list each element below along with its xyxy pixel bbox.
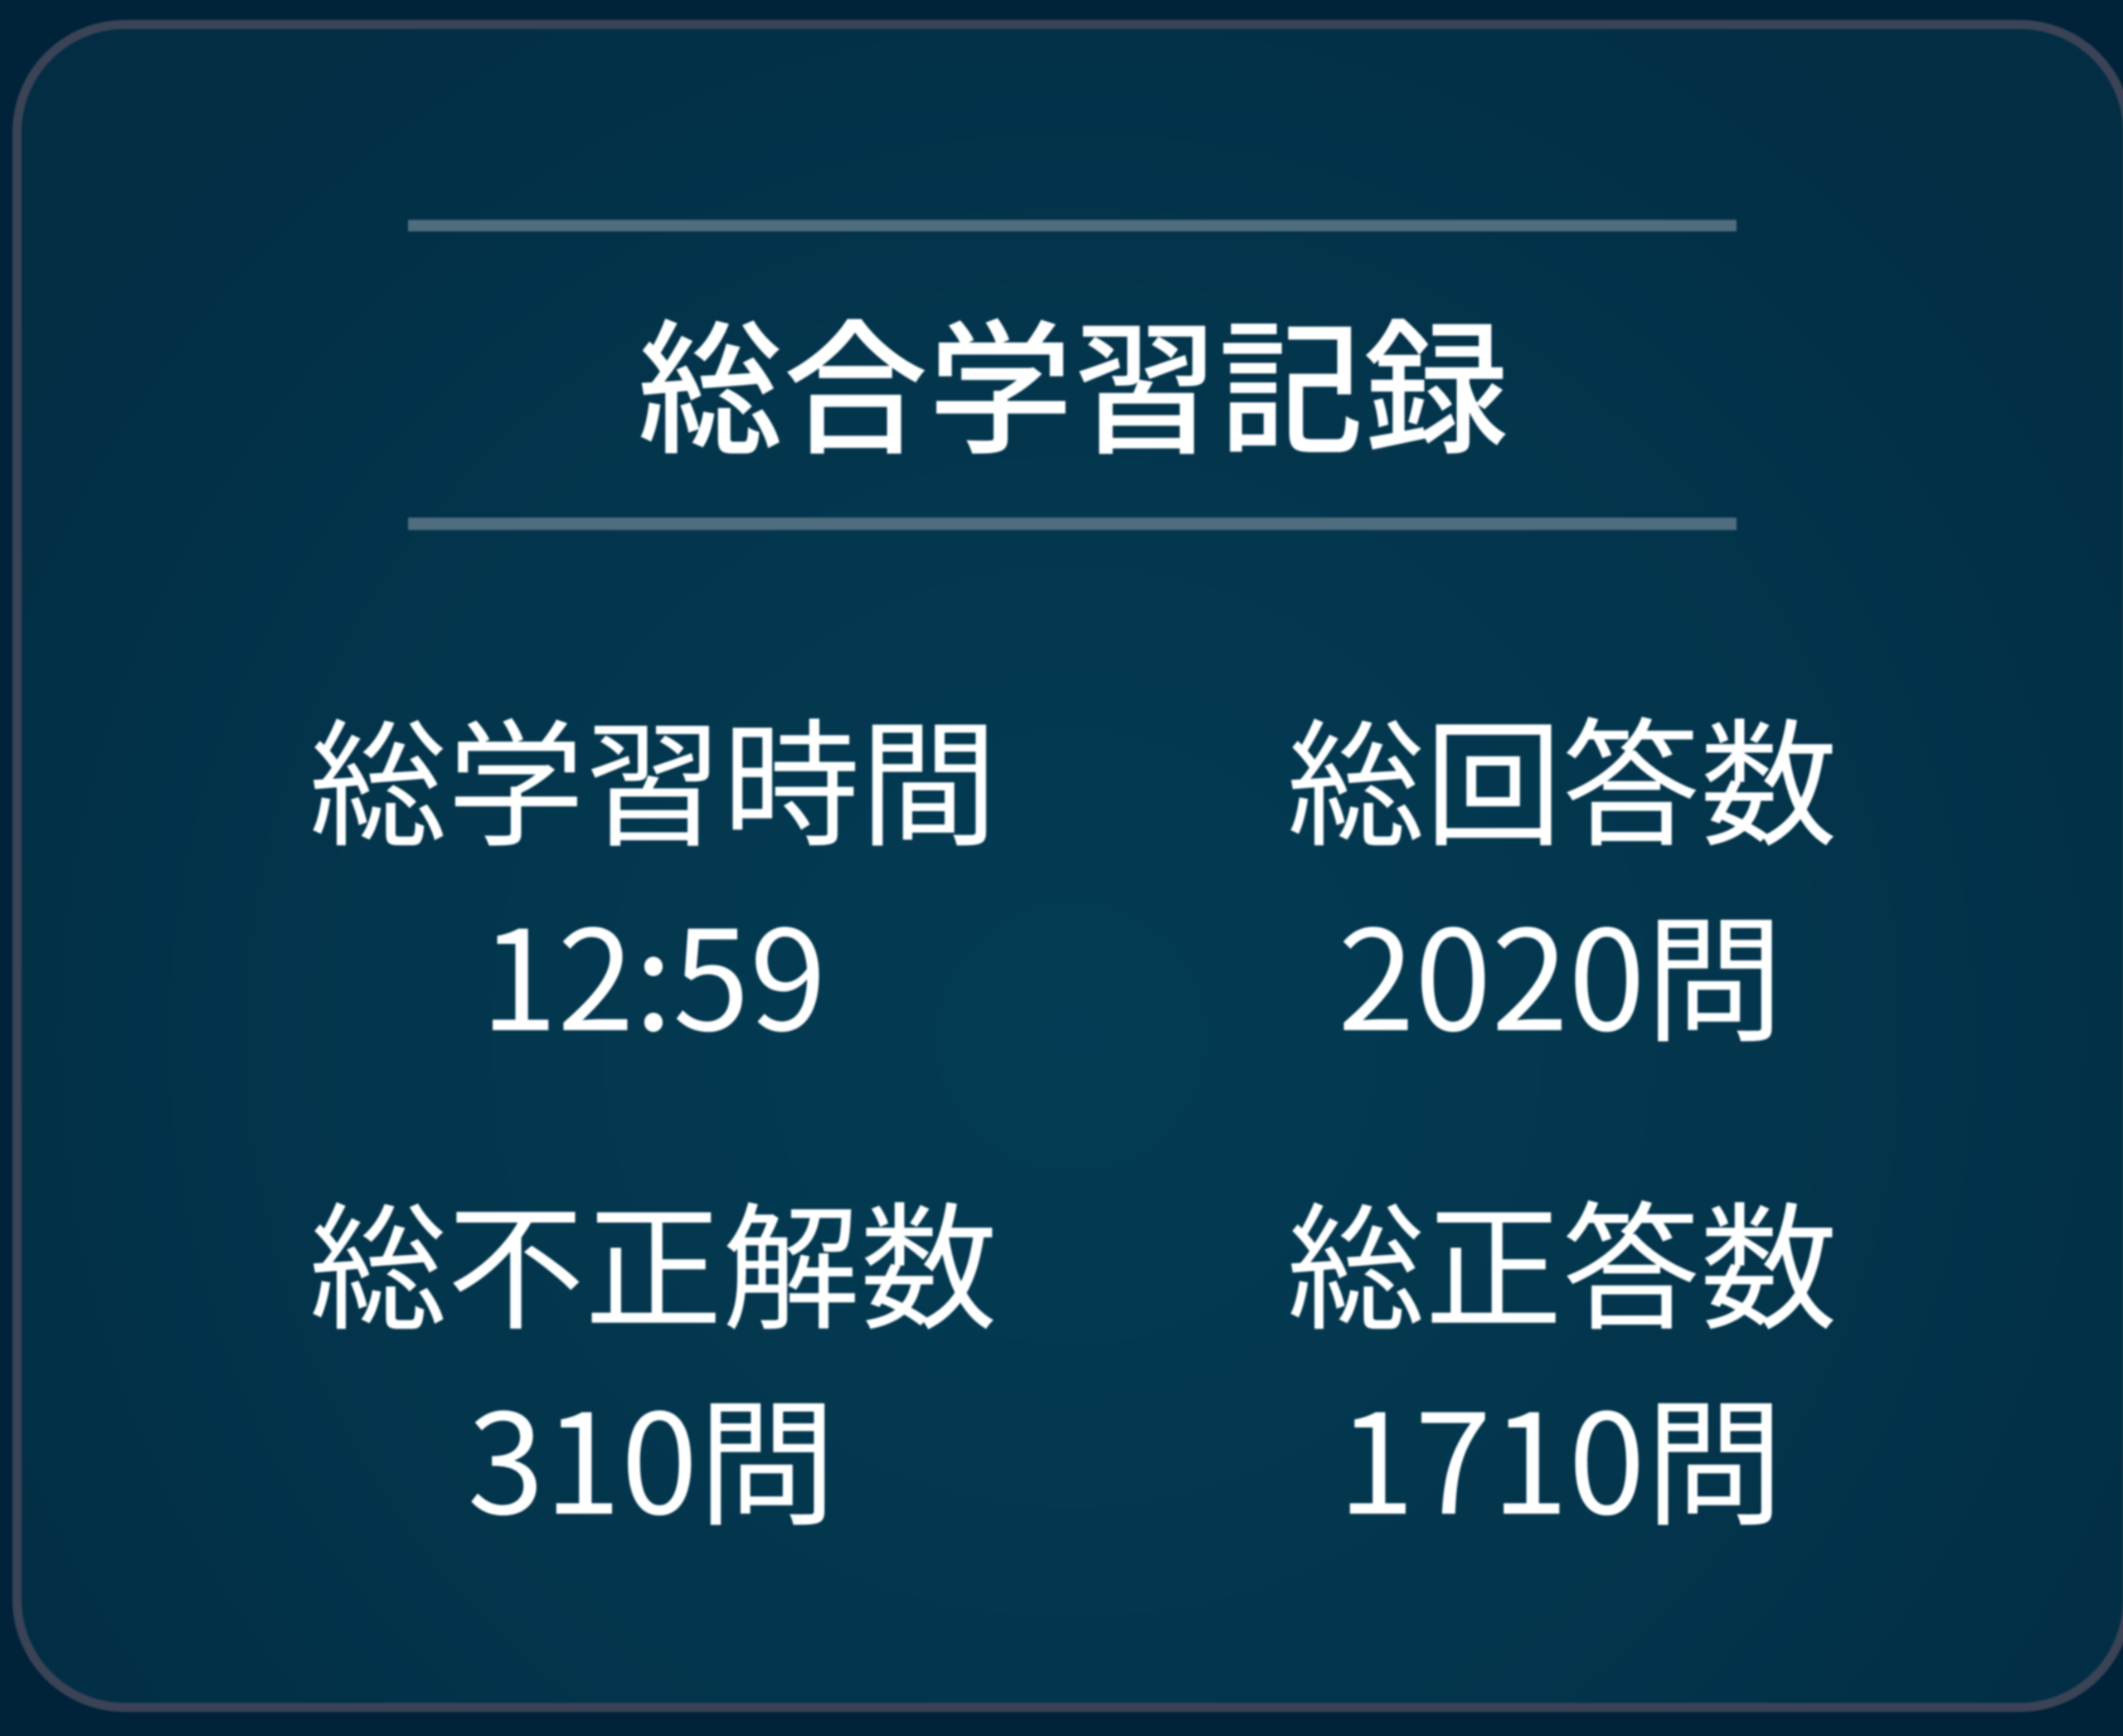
- stat: total incorrect: 310問: [467, 1354, 837, 1554]
- stat: total study time: 総学習時間: [309, 674, 998, 874]
- stat: total answers: 2020問: [1338, 870, 1784, 1071]
- stat: total study time: [309, 674, 998, 1071]
- stat: total study time: 12:59: [480, 870, 827, 1071]
- heading: overall study record: [408, 220, 1737, 530]
- stat: total correct: [1287, 1158, 1838, 1554]
- stat: total answers: 総回答数: [1287, 674, 1838, 874]
- stat: total incorrect: 総不正解数: [309, 1158, 998, 1358]
- heading: overall study record: 総合学習記録: [638, 274, 1508, 484]
- stat: total incorrect: [309, 1158, 998, 1554]
- stat: total answers: [1287, 674, 1838, 1071]
- stat: total correct: 総正答数: [1287, 1158, 1838, 1358]
- stat: total correct: 1710問: [1338, 1354, 1784, 1554]
